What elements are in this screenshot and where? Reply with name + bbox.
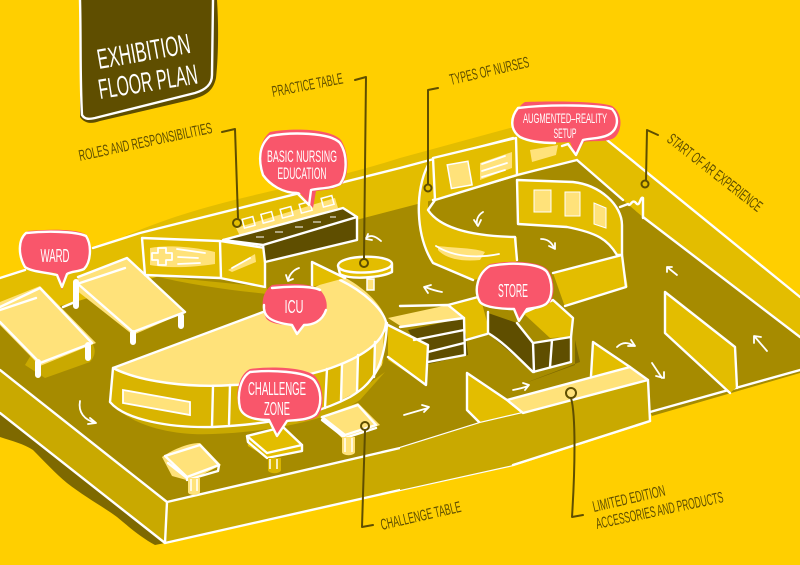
title	[80, 0, 218, 123]
stool: challenge zone	[247, 427, 302, 473]
lit side panels	[341, 355, 358, 400]
label: types of nurses	[424, 54, 531, 192]
bubble: ICU	[263, 284, 327, 335]
ICU half-circle room	[110, 275, 387, 427]
label: challenge table	[361, 422, 463, 534]
label: practice table	[271, 71, 368, 267]
bubble: ward: WARD	[40, 246, 70, 266]
stool: challenge table	[320, 403, 380, 455]
store block	[488, 300, 573, 372]
back wall outlines	[0, 138, 800, 337]
floor	[0, 160, 800, 502]
low wall: front left	[467, 373, 523, 423]
augmented-reality room wall	[517, 180, 628, 307]
connecting wall behind store	[448, 296, 490, 340]
title: FLOOR PLAN	[96, 59, 200, 105]
bubble: ward	[20, 230, 91, 290]
bubble: augmented-reality setup	[512, 101, 620, 157]
label: roles and responsibilities: ROLES AND RESPONSIBILITIES	[77, 120, 214, 165]
ICU back wall wedge	[312, 262, 345, 287]
types of nurses wall	[419, 138, 558, 280]
divider wall	[665, 292, 737, 393]
practice table	[338, 257, 392, 290]
dark display table	[223, 208, 357, 262]
bed: left	[0, 286, 96, 375]
label: limited edition accessories and products: LIMITED EDITION	[591, 483, 667, 516]
bubble: challenge zone: CHALLENGE	[248, 379, 306, 399]
bubble: challenge zone: ZONE	[264, 399, 290, 419]
floor direction arrows	[80, 212, 767, 424]
bubble: store: STORE	[498, 281, 528, 301]
label: types of nurses: TYPES OF NURSES	[448, 54, 531, 89]
platform outlines	[0, 370, 800, 543]
start of AR doorway	[620, 198, 643, 218]
wall panel with cross	[142, 238, 265, 287]
stool: left	[162, 443, 221, 495]
bubble: challenge zone	[237, 367, 323, 438]
back wall strip	[0, 138, 800, 337]
bubble: augmented-reality setup: SETUP	[554, 125, 576, 141]
title: EXHIBITION	[95, 28, 193, 75]
platform shadow	[0, 400, 180, 545]
label: limited edition accessories and products	[566, 388, 725, 533]
bubble: ICU: ICU	[284, 297, 304, 317]
label: start of AR experience	[642, 130, 765, 216]
platform side faces	[0, 370, 650, 543]
low wall: front right	[591, 342, 630, 376]
label: roles and responsibilities	[77, 120, 241, 227]
bubble: store	[476, 262, 554, 322]
shelf block	[388, 297, 487, 385]
limited edition display block	[400, 367, 650, 490]
bubble: basic nursing education: BASIC NURSING	[267, 148, 337, 166]
label: practice table: PRACTICE TABLE	[271, 71, 344, 101]
bed: right	[76, 258, 186, 342]
panel: exhibition floor plan platform	[0, 128, 800, 543]
bubble: augmented-reality setup: AUGMENTED–REALITY	[523, 110, 607, 126]
roles and responsibilities wall cards	[236, 196, 338, 236]
soft floor shadows	[25, 275, 580, 434]
bubble: basic nursing education: EDUCATION	[278, 165, 326, 183]
bubble: basic nursing education	[260, 130, 348, 208]
label: challenge table: CHALLENGE TABLE	[379, 499, 463, 534]
back wall backdrop	[125, 128, 610, 236]
